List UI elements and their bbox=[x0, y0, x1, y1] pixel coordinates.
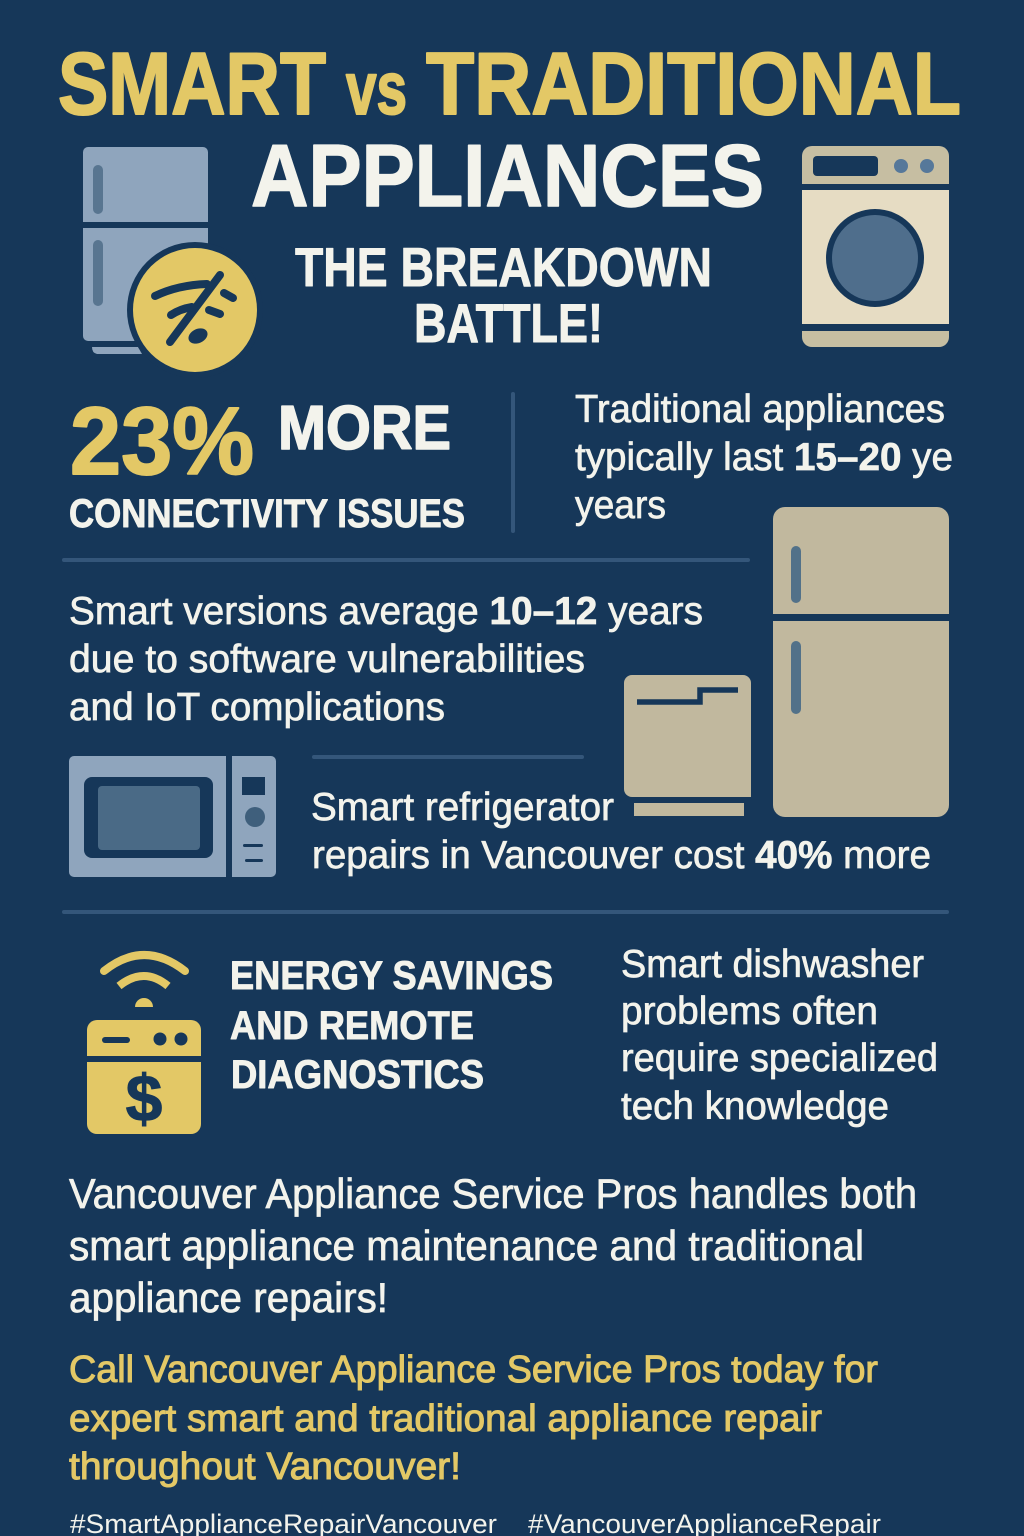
heading: energy savings: DIAGNOSTICS bbox=[231, 1053, 484, 1097]
icon: wifi appliance with dollar sign: $ bbox=[126, 1061, 162, 1135]
icon: smart fridge with broken wifi badge bbox=[83, 147, 263, 378]
stat: 23% more connectivity issues: CONNECTIVITY ISSUES bbox=[69, 492, 465, 536]
text: traditional lifespan: typically last 15–20 ye bbox=[575, 436, 953, 479]
heading: energy savings: AND REMOTE bbox=[230, 1004, 474, 1048]
hashtags bbox=[70, 1509, 881, 1536]
subtitle: BATTLE! bbox=[414, 292, 603, 354]
title: SMART bbox=[58, 34, 326, 133]
stat: 23% more connectivity issues bbox=[69, 388, 465, 536]
text: repair cost: Smart refrigerator bbox=[311, 786, 614, 829]
text: smart lifespan: and IoT complications bbox=[69, 686, 445, 729]
text: repair cost bbox=[311, 786, 931, 877]
text: traditional lifespan: years bbox=[575, 484, 666, 527]
title: APPLIANCES bbox=[251, 126, 764, 225]
stat: 23% more connectivity issues: MORE bbox=[278, 394, 451, 463]
text: smart lifespan: Smart versions average 10–12 years bbox=[69, 590, 703, 633]
text: dishwasher problems bbox=[621, 943, 938, 1128]
icon: large fridge bbox=[773, 507, 949, 817]
text: service statement: Vancouver Appliance Service Pros handles both bbox=[69, 1170, 917, 1217]
text: smart lifespan bbox=[69, 590, 703, 729]
text: traditional lifespan: Traditional appliances bbox=[575, 388, 945, 431]
icon: microwave bbox=[69, 756, 276, 877]
text: smart lifespan: due to software vulnerabilities bbox=[69, 638, 585, 681]
text: service statement: smart appliance maintenance and traditional bbox=[69, 1222, 864, 1269]
stat: 23% more connectivity issues: 23% bbox=[70, 388, 254, 495]
heading: energy savings bbox=[230, 954, 553, 1097]
text: dishwasher problems: problems often bbox=[621, 990, 878, 1033]
title: vs bbox=[346, 47, 407, 130]
text: dishwasher problems: tech knowledge bbox=[621, 1085, 889, 1128]
title bbox=[58, 34, 961, 225]
text: service statement bbox=[69, 1170, 917, 1321]
call to action: Call Vancouver Appliance Service Pros today for bbox=[69, 1349, 878, 1391]
text: dishwasher problems: Smart dishwasher bbox=[621, 943, 924, 986]
icon: wifi appliance with dollar sign bbox=[87, 955, 201, 1135]
call to action bbox=[69, 1349, 878, 1488]
text: traditional lifespan bbox=[575, 388, 953, 527]
heading: energy savings: ENERGY SAVINGS bbox=[230, 954, 553, 998]
title: TRADITIONAL bbox=[426, 34, 961, 133]
icon: dishwasher bbox=[624, 675, 751, 816]
call to action: throughout Vancouver! bbox=[69, 1446, 461, 1488]
subtitle: THE BREAKDOWN bbox=[295, 236, 712, 298]
text: dishwasher problems: require specialized bbox=[621, 1037, 938, 1080]
icon: traditional washer bbox=[802, 146, 949, 347]
call to action: expert smart and traditional appliance repair bbox=[69, 1398, 822, 1440]
text: service statement: appliance repairs! bbox=[69, 1274, 388, 1321]
text: repair cost: repairs in Vancouver cost 40% more bbox=[312, 834, 931, 877]
subtitle bbox=[295, 236, 712, 354]
